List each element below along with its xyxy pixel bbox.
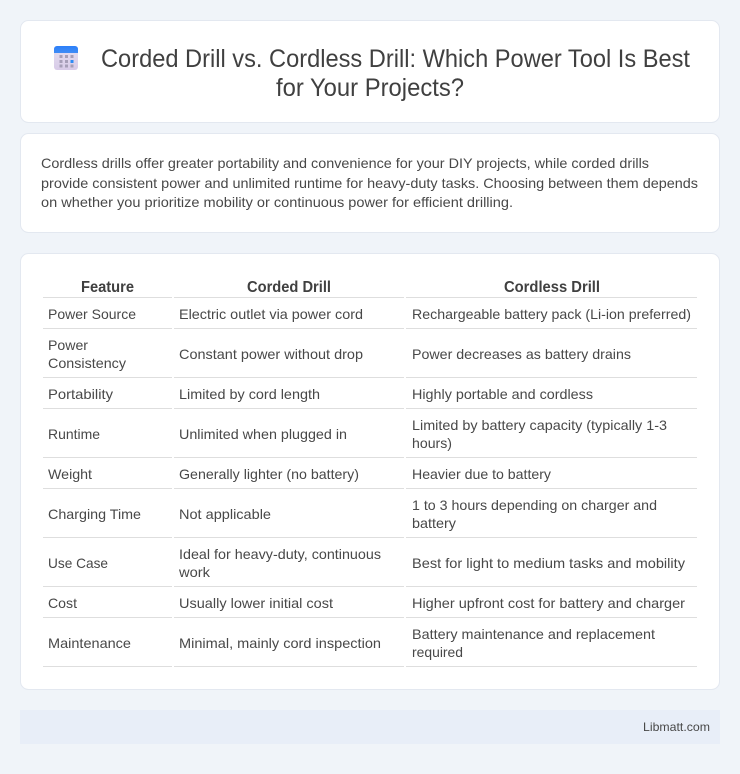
row: charging time: 1 to 3 hours depending on charger and — [412, 497, 657, 513]
row: power consistency — [48, 337, 631, 371]
footer — [20, 710, 720, 744]
row: runtime: Unlimited when plugged in — [179, 426, 347, 442]
row: portability: Limited by cord length — [179, 386, 320, 402]
text block: introduction paragraph: Cordless drills offer greater portability and convenience for your DIY projects, while corded drills — [41, 155, 649, 171]
row: use case — [48, 546, 685, 580]
title: for Your Projects? — [276, 74, 464, 102]
row: use case: Ideal for heavy-duty, continuous — [179, 546, 381, 562]
title — [101, 45, 690, 102]
row: portability: Portability — [48, 386, 113, 402]
row: runtime: Limited by battery capacity (typically 1-3 — [412, 417, 667, 433]
row: cost: Usually lower initial cost — [179, 595, 333, 611]
row: power source: Power Source — [48, 306, 136, 322]
row: maintenance: Minimal, mainly cord inspection — [179, 635, 381, 651]
text block: introduction paragraph — [41, 155, 698, 210]
panel: title header — [20, 20, 720, 122]
row: power consistency: Consistency — [48, 355, 126, 371]
table header: Feature — [81, 279, 134, 296]
row: power consistency: Power decreases as battery drains — [412, 346, 631, 362]
icon: calendar — [54, 46, 78, 70]
row: weight — [48, 466, 551, 482]
row: weight: Generally lighter (no battery) — [179, 466, 359, 482]
row: power source: Electric outlet via power cord — [179, 306, 363, 322]
row: power source — [48, 306, 691, 322]
row: charging time: Not applicable — [179, 506, 271, 522]
row: runtime — [48, 417, 667, 451]
row: power consistency: Constant power without drop — [179, 346, 363, 362]
row: portability — [48, 386, 593, 402]
row: runtime: Runtime — [48, 426, 100, 442]
panel: introduction — [20, 134, 720, 232]
row: power source: Rechargeable battery pack (Li-ion preferred) — [412, 306, 691, 322]
footer: Libmatt.com — [643, 720, 710, 734]
table header: Cordless Drill — [504, 279, 600, 296]
row: maintenance — [48, 626, 655, 660]
table header — [81, 279, 600, 296]
row: weight: Weight — [48, 466, 92, 482]
row: charging time — [48, 497, 657, 531]
row: cost — [48, 595, 685, 611]
row: maintenance: required — [412, 644, 463, 660]
text block: introduction paragraph: on whether you prioritize mobility or continuous power for efficient drilling. — [41, 194, 513, 210]
row: use case: Use Case — [48, 555, 108, 571]
row: weight: Heavier due to battery — [412, 466, 551, 482]
panel: comparison table — [20, 254, 720, 690]
row: maintenance: Battery maintenance and replacement — [412, 626, 655, 642]
row: runtime: hours) — [412, 435, 452, 451]
row: maintenance: Maintenance — [48, 635, 131, 651]
row: cost: Cost — [48, 595, 77, 611]
title: Corded Drill vs. Cordless Drill: Which Power Tool Is Best — [101, 45, 690, 73]
table header: Corded Drill — [247, 279, 331, 296]
text block: introduction paragraph: provide consistent power and unlimited runtime for heavy-duty tasks. Choosing between them depends — [41, 175, 698, 191]
row: cost: Higher upfront cost for battery and charger — [412, 595, 685, 611]
row: portability: Highly portable and cordless — [412, 386, 593, 402]
row: charging time: Charging Time — [48, 506, 141, 522]
row: charging time: battery — [412, 515, 456, 531]
row: use case: Best for light to medium tasks and mobility — [412, 555, 685, 571]
row: use case: work — [178, 564, 211, 580]
row: power consistency: Power — [48, 337, 88, 353]
